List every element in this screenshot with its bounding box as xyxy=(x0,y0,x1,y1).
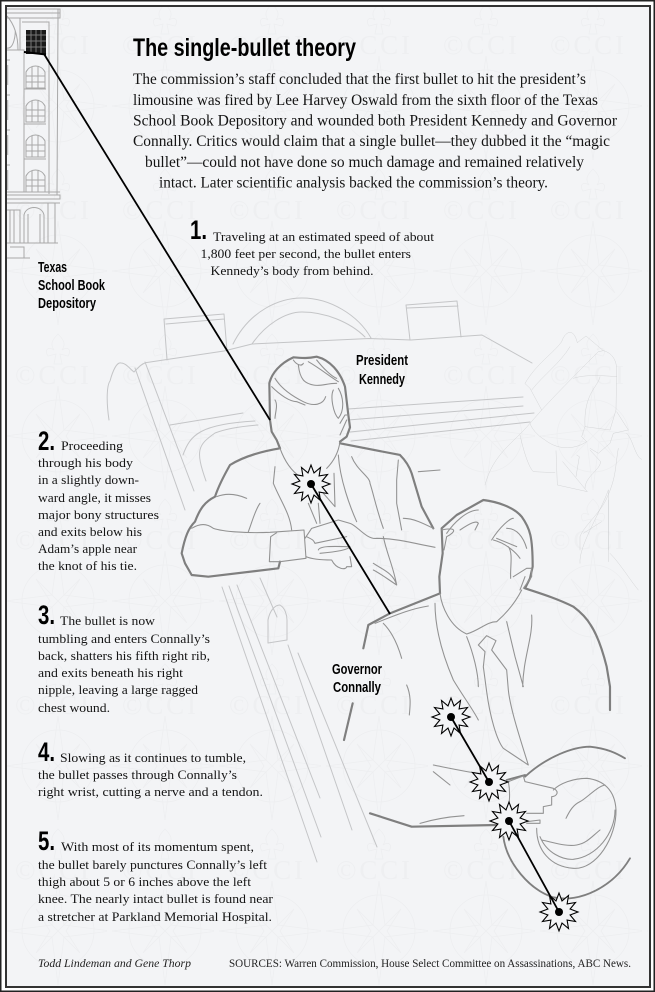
Texas School Book Depository building xyxy=(7,9,60,258)
step 4 xyxy=(38,737,263,799)
building label: School Book xyxy=(38,278,106,294)
step 5: thigh about 5 or 6 inches above the left xyxy=(38,874,251,889)
impact starburst: Connally's chest xyxy=(432,698,470,736)
step 1 xyxy=(190,215,434,278)
step 2: through his body xyxy=(38,455,134,470)
step 2: 2. xyxy=(38,426,55,456)
step 5: a stretcher at Parkland Memorial Hospital. xyxy=(38,909,272,924)
impact starburst: stretcher xyxy=(540,893,578,931)
step 5 xyxy=(38,826,274,924)
President Kennedy figure xyxy=(182,357,440,585)
step 1: 1,800 feet per second, the bullet enters xyxy=(200,246,411,261)
Governor Connally figure xyxy=(344,490,638,899)
intro paragraph xyxy=(133,71,618,192)
building label xyxy=(38,260,106,312)
sixth floor window xyxy=(24,30,46,54)
limousine background line drawing xyxy=(107,298,534,862)
intro paragraph: intact. Later scientific analysis backed the commission’s theory. xyxy=(159,174,548,192)
step 3: and exits beneath his right xyxy=(38,665,183,680)
building label: Texas xyxy=(38,260,67,276)
intro paragraph: bullet”—could not have done so much damage and remained relatively xyxy=(145,154,584,171)
step 4: right wrist, cutting a nerve and a tendon. xyxy=(38,784,263,799)
intro paragraph: School Book Depository and wounded both President Kennedy and Governor xyxy=(133,112,618,130)
step 5: knee. The nearly intact bullet is found near xyxy=(38,891,274,906)
step 3: 3. xyxy=(38,600,55,630)
step 2: major bony structures xyxy=(38,507,159,522)
step 2: the knot of his tie. xyxy=(38,558,137,573)
step 3: chest wound. xyxy=(38,700,110,715)
step 2: Adam’s apple near xyxy=(38,541,138,556)
title: The single-bullet theory xyxy=(133,34,356,62)
step 4: 4. xyxy=(38,737,55,767)
step 3: nipple, leaving a large ragged xyxy=(38,682,199,697)
step 5: the bullet barely punctures Connally’s left xyxy=(38,857,267,872)
step 3: The bullet is now xyxy=(60,613,156,628)
Kennedy label: President xyxy=(356,353,408,369)
step 4: Slowing as it continues to tumble, xyxy=(60,750,246,765)
step 4: the bullet passes through Connally’s xyxy=(38,767,237,782)
background figure on right xyxy=(485,332,642,550)
step 1: Kennedy’s body from behind. xyxy=(210,263,374,278)
step 2 xyxy=(38,426,159,573)
Connally label: Connally xyxy=(333,680,381,696)
step 5: 5. xyxy=(38,826,55,856)
step 3: tumbling and enters Connally’s xyxy=(38,631,210,646)
step 3 xyxy=(38,600,210,715)
step 2: Proceeding xyxy=(61,438,124,453)
impact starburst: Connally's wrist xyxy=(470,763,508,801)
step 1: Traveling at an estimated speed of about xyxy=(213,229,434,244)
building label: Depository xyxy=(38,296,96,312)
intro paragraph: Connally. Critics would claim that a single bullet—they dubbed it the “magic xyxy=(133,133,610,150)
step 5: With most of its momentum spent, xyxy=(61,839,254,854)
sources: SOURCES: Warren Commission, House Select Committee on Assassinations, ABC News. xyxy=(229,958,631,970)
step 3: back, shatters his fifth right rib, xyxy=(38,648,210,663)
bullet trajectory lines xyxy=(44,54,559,912)
Kennedy label xyxy=(356,353,408,388)
Connally label: Governor xyxy=(332,662,382,678)
step 2: and exits below his xyxy=(38,524,142,539)
intro paragraph: The commission’s staff concluded that the first bullet to hit the president’s xyxy=(133,71,586,88)
intro paragraph: limousine was fired by Lee Harvey Oswald from the sixth floor of the Texas xyxy=(133,92,598,109)
step 2: ward angle, it misses xyxy=(38,490,151,505)
impact starburst: Kennedy's neck xyxy=(292,465,330,503)
impact starburst: Connally's thigh xyxy=(490,802,528,840)
step 1: 1. xyxy=(190,215,207,245)
Kennedy label: Kennedy xyxy=(359,372,405,388)
Connally label xyxy=(332,662,382,696)
credit: Todd Lindeman and Gene Thorp xyxy=(38,958,191,970)
step 2: in a slightly down- xyxy=(38,472,139,487)
